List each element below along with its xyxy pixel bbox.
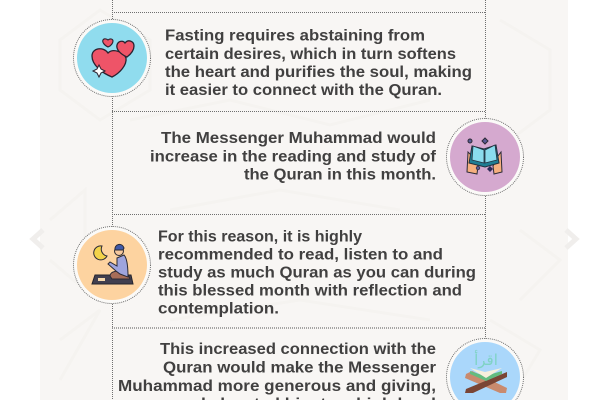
text: recommendation: this blessed month with reflection and (158, 282, 462, 300)
text: fasting: Fasting requires abstaining from (165, 28, 425, 44)
text: generosity: Muhammad more generous and giving, (118, 378, 436, 395)
panel: the Messenger's reading (150, 118, 524, 196)
icon: hearts (74, 20, 150, 96)
text: fasting: it easier to connect with the Quran. (165, 82, 442, 99)
text: generosity (118, 341, 436, 400)
text: generosity: This increased connection with the (160, 341, 436, 358)
icon: hands holding open book (446, 118, 524, 196)
arrow: right carousel chevron (566, 230, 576, 248)
timeline frame (112, 0, 486, 400)
icon: Quran on wooden stand (446, 338, 524, 400)
text: Messenger reading: The Messenger Muhammad would (161, 130, 436, 147)
text: recommendation: For this reason, it is highly (158, 228, 362, 246)
text: Messenger reading (150, 130, 437, 184)
text: recommendation: study as much Quran as you can during (158, 264, 476, 282)
icon: Quran on wooden stand: اقرأ (474, 350, 498, 369)
panel: recommendation to read (74, 226, 476, 318)
panel: generosity (118, 338, 524, 400)
text: fasting (165, 28, 472, 99)
text: recommendation (158, 228, 476, 318)
icon: person praying with crescent (74, 226, 150, 304)
panel: fasting softens the heart (74, 20, 472, 99)
arrow: left carousel chevron (33, 230, 43, 248)
text: Messenger reading: increase in the reading and study of (150, 148, 437, 166)
text: recommendation: recommended to read, listen to and (158, 246, 443, 264)
text: fasting: certain desires, which in turn softens (165, 46, 456, 63)
text: recommendation: contemplation. (158, 300, 279, 318)
text: fasting: the heart and purifies the soul, making (165, 64, 472, 81)
text: generosity: Quran would make the Messenger (163, 360, 436, 376)
text: Messenger reading: the Quran in this month. (244, 166, 436, 184)
